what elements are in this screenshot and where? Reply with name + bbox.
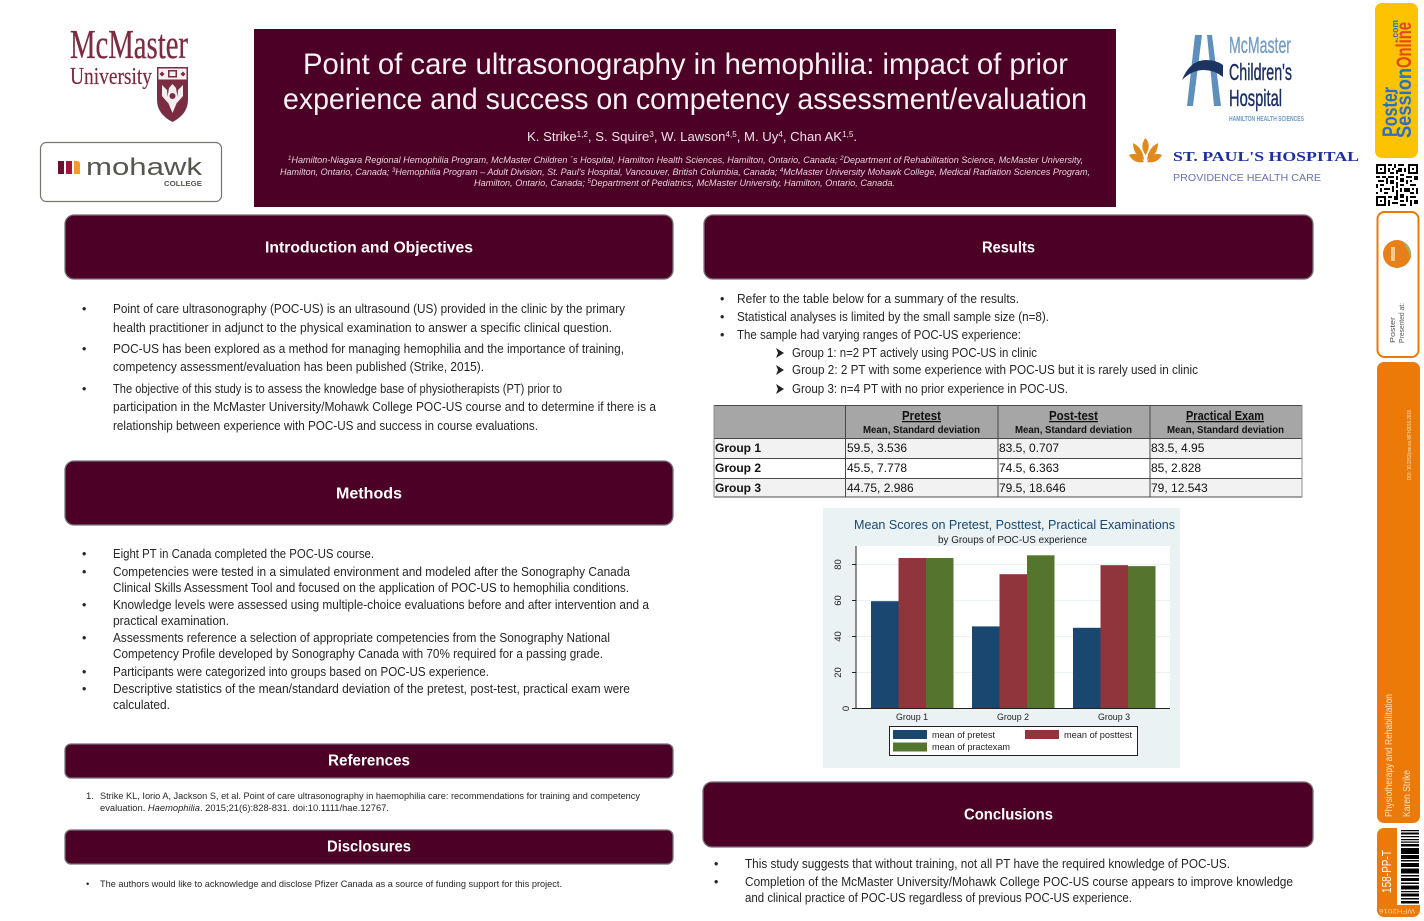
chart axes: Group 3: [1098, 712, 1130, 723]
affiliations: Hemophilia Program – Adult Division, St. Paul's Hospital, Vancouver, British Columbia, Canada;: [395, 167, 780, 177]
authors: , M. Uy: [737, 129, 779, 144]
text block: introduction bullets: participation in the McMaster University/Mohawk College POC-US course and to determine if there is a: [113, 400, 656, 414]
text block: reference list: 1.: [86, 791, 94, 802]
logo: McMaster Children's Hospital: Children's: [1229, 59, 1292, 85]
sidebar: QR code: [1376, 164, 1418, 206]
sidebar: barcode tag: [1377, 828, 1420, 917]
text block: conclusions bullets: Completion of the McMaster University/Mohawk College POC-US course appears to improve knowledge: [745, 875, 1293, 889]
authors: K. Strike: [527, 129, 576, 144]
sidebar: PosterSessionOnline logo: .com: [1390, 20, 1400, 40]
sidebar: presented at box: Poster: [1390, 316, 1397, 343]
text block: conclusions bullets: This study suggests that without training, not all PT have the required knowledge of POC-US.: [745, 857, 1230, 871]
affiliations: Hamilton, Ontario, Canada;: [280, 167, 389, 177]
text block: introduction bullets: Point of care ultrasonography (POC-US) is an ultrasound (US) provided in the clinic by the primary: [113, 302, 626, 316]
text block: introduction bullets: •: [82, 342, 86, 356]
text block: methods bullets: •: [82, 598, 86, 612]
text block: conclusions bullets: •: [714, 857, 718, 871]
authors: , Chan AK: [783, 129, 842, 144]
results table: Post-test: [1049, 409, 1099, 423]
sidebar: barcode tag: 158-PP-T: [1380, 850, 1394, 893]
text block: introduction bullets: POC-US has been explored as a method for managing hemophilia and the importance of training,: [113, 342, 624, 356]
text block: disclosure statement: The authors would like to acknowledge and disclose Pfizer Canada as a source of funding support for this project.: [100, 879, 562, 890]
panel: conclusions: [703, 782, 1313, 905]
text block: methods bullets: •: [82, 682, 86, 696]
affiliations: 3: [392, 168, 396, 174]
results table: 85, 2.828: [1151, 461, 1201, 475]
logo: St. Paul's Hospital: PROVIDENCE HEALTH CARE: [1173, 173, 1321, 184]
text block: introduction bullets: [82, 302, 656, 433]
text block: methods bullets: practical examination.: [113, 614, 229, 628]
heading: methods: [65, 461, 673, 525]
chart axes: 80: [833, 559, 844, 570]
results table: 83.5, 4.95: [1151, 441, 1205, 455]
results table: Group 3: [715, 481, 761, 495]
results table: Group 1: [715, 441, 761, 455]
text block: methods bullets: Knowledge levels were assessed using multiple-choice evaluations before and after intervention and a: [113, 598, 649, 612]
text block: conclusions bullets: •: [714, 875, 718, 889]
heading: conclusions: [703, 782, 1313, 847]
results table: 59.5, 3.536: [847, 441, 907, 455]
panel: results: [704, 215, 1313, 768]
text block: reference list: Strike KL, Iorio A, Jackson S, et al. Point of care ultrasonography in haemophilia care: recommendations for training and competency: [100, 791, 640, 802]
authors: 4: [778, 130, 783, 139]
heading: methods: Methods: [336, 486, 402, 502]
chart legend: mean of pretest: [932, 730, 995, 741]
chart axes: [833, 546, 1170, 723]
text block: introduction bullets: competency assessment/evaluation has been published (Strike, 2015).: [113, 360, 484, 374]
sidebar: orange details bar: Karen Strike: [1402, 770, 1413, 817]
chart axes: 20: [833, 667, 844, 678]
results table: Mean, Standard deviation: [863, 425, 980, 436]
results table: 44.75, 2.986: [847, 481, 914, 495]
text block: methods bullets: Descriptive statistics of the mean/standard deviation of the pretest, post-test, practical exam were: [113, 682, 630, 696]
results table: 79, 12.543: [1151, 481, 1208, 495]
text block: introduction bullets: •: [82, 382, 86, 396]
bars: group 2: [972, 555, 1054, 708]
text block: results bullets: Group 1: n=2 PT actively using POC-US in clinic: [792, 346, 1037, 360]
panel: disclosures: [65, 830, 673, 890]
results table: Practical Exam: [1186, 409, 1264, 423]
text block: methods bullets: Competency Profile developed by Sonography Canada with 70% required for a passing grade.: [113, 647, 603, 661]
logo: Mohawk College: [40, 142, 222, 202]
results table: 45.5, 7.778: [847, 461, 907, 475]
chart legend: mean of posttest: [1064, 730, 1132, 741]
authors: 4,5: [725, 130, 737, 139]
results table: 74.5, 6.363: [999, 461, 1059, 475]
affiliations: 1: [288, 156, 291, 162]
logo: McMaster Children's Hospital: HAMILTON HEALTH SCIENCES: [1229, 114, 1304, 123]
bars: group 1: [871, 558, 954, 708]
text block: methods bullets: Participants were categorized into groups based on POC-US experience.: [113, 665, 489, 679]
text block: reference list: evaluation. Haemophilia. 2015;21(6):828-831. doi:10.1111/hae.12767.: [100, 803, 389, 814]
authors: , W. Lawson: [654, 129, 725, 144]
chart subtitle: by Groups of POC-US experience: [938, 535, 1087, 546]
icon: congress emblem: [1383, 240, 1411, 268]
sidebar: barcode tag: WFH2016: [1379, 907, 1415, 914]
logo: Mohawk College: mohawk: [86, 154, 203, 181]
heading: results: [704, 215, 1313, 279]
heading: disclosures: [65, 830, 673, 864]
text block: methods bullets: •: [82, 565, 86, 579]
sidebar: orange details bar: Physiotherapy and Rehabilitation: [1384, 694, 1395, 817]
text block: methods bullets: Assessments reference a selection of appropriate competencies from the Sonography National: [113, 631, 610, 645]
chart legend: [890, 726, 1138, 756]
authors: 3: [649, 130, 654, 139]
text block: methods bullets: Competencies were tested in a simulated environment and modeled after the Sonography Canada: [113, 565, 630, 579]
logo: St. Paul's Hospital: [1129, 138, 1359, 184]
chart legend: mean of practexam: [932, 742, 1010, 753]
heading: disclosures: Disclosures: [327, 838, 411, 856]
affiliations: Hamilton-Niagara Regional Hemophilia Program, McMaster Children ´s Hospital, Hamilton Health Sciences, Hamilton, Ontario, Canada;: [291, 155, 840, 165]
logo: McMaster Children's Hospital: Hospital: [1229, 85, 1282, 111]
affiliations: [280, 155, 1090, 188]
sidebar: PosterSessionOnline logo: Session: [1393, 68, 1416, 138]
text block: introduction bullets: health practitioner in adjunct to the physical examination to answer a specific clinical question.: [113, 321, 612, 335]
logo: Mohawk College: COLLEGE: [164, 181, 202, 188]
title: [283, 48, 1087, 116]
text block: conclusions bullets: [714, 857, 1293, 905]
logo: McMaster Children's Hospital: McMaster: [1229, 32, 1291, 58]
title banner: [254, 29, 1116, 207]
text block: introduction bullets: •: [82, 302, 86, 316]
logo: McMaster University: McMaster: [70, 21, 188, 67]
affiliations: Department of Pediatrics, McMaster University, Hamilton, Ontario, Canada.: [591, 178, 895, 188]
panel: references: [65, 744, 673, 814]
text block: methods bullets: •: [82, 547, 86, 561]
sidebar: orange details bar: [1377, 362, 1420, 823]
affiliations: McMaster University Mohawk College, Medical Radiation Sciences Program,: [783, 167, 1090, 177]
chart axes: 40: [833, 631, 844, 642]
chart title: Mean Scores on Pretest, Posttest, Practical Examinations: [854, 518, 1175, 532]
results table: Mean, Standard deviation: [1167, 425, 1284, 436]
text block: results bullets: Group 3: n=4 PT with no prior experience in POC-US.: [792, 382, 1068, 396]
sidebar: PosterSessionOnline logo: Poster: [1379, 87, 1402, 137]
chart axes: 0: [841, 706, 852, 711]
heading: conclusions: Conclusions: [964, 806, 1053, 824]
logo: McMaster University: [70, 21, 188, 122]
title: experience and success on competency assessment/evaluation: [283, 83, 1087, 116]
text block: results bullets: •: [720, 292, 724, 306]
results table: 79.5, 18.646: [999, 481, 1066, 495]
text block: methods bullets: calculated.: [113, 698, 170, 712]
text block: results bullets: •: [720, 310, 724, 324]
heading: introduction and objectives: Introduction and Objectives: [265, 240, 473, 256]
bars: group 3: [1073, 565, 1156, 708]
text block: methods bullets: •: [82, 665, 86, 679]
sidebar: presented at box: Presented at:: [1399, 303, 1406, 343]
logo: St. Paul's Hospital: ST. PAUL'S HOSPITAL: [1173, 150, 1359, 165]
authors: 1,2: [577, 130, 588, 139]
text block: disclosure statement: •: [86, 879, 89, 890]
results table: Pretest: [902, 409, 942, 423]
results table: Mean, Standard deviation: [1015, 425, 1132, 436]
heading: introduction and objectives: [65, 215, 673, 279]
panel: introduction and objectives: [65, 215, 673, 433]
sidebar: PosterSessionOnline logo: Online: [1393, 22, 1416, 68]
text block: reference list: [86, 791, 640, 814]
logo: McMaster Children's Hospital: [1182, 32, 1304, 123]
text block: methods bullets: Clinical Skills Assessment Tool and focused on the application of POC-US to hemophilia conditions.: [113, 581, 629, 595]
text block: results bullets: The sample had varying ranges of POC-US experience:: [737, 328, 1021, 342]
text block: results bullets: Refer to the table below for a summary of the results.: [737, 292, 1019, 306]
affiliations: 5: [587, 179, 592, 185]
authors: .: [853, 129, 857, 144]
text block: methods bullets: •: [82, 631, 86, 645]
chart axes: 60: [833, 595, 844, 606]
text block: methods bullets: Eight PT in Canada completed the POC-US course.: [113, 547, 374, 561]
text block: introduction bullets: The objective of this study is to assess the knowledge base of physiotherapists (PT) prior to: [113, 382, 562, 396]
logo: McMaster University: University: [70, 64, 152, 90]
sidebar: orange details bar: DOI: 10.3252/pso.eu.WFH2016.2016: [1407, 410, 1413, 480]
sidebar: presented at box: [1378, 212, 1418, 357]
panel: methods: [65, 461, 673, 712]
authors: 1,5: [842, 130, 854, 139]
affiliations: Hamilton, Ontario, Canada;: [474, 178, 583, 188]
results table: [714, 405, 1302, 497]
bar chart: mean scores: [823, 508, 1180, 768]
text block: results bullets: Group 2: 2 PT with some experience with POC-US but it is rarely used in clinic: [792, 363, 1198, 377]
results table: Group 2: [715, 461, 761, 475]
affiliations: 2: [839, 156, 844, 162]
chart axes: Group 2: [997, 712, 1029, 723]
text block: conclusions bullets: and clinical practice of POC-US regardless of previous POC-US experience.: [745, 891, 1132, 905]
text block: results bullets: Statistical analyses is limited by the small sample size (n=8).: [737, 310, 1049, 324]
heading: references: References: [328, 752, 410, 770]
text block: methods bullets: [82, 547, 649, 712]
authors: , S. Squire: [588, 129, 649, 144]
sidebar: PosterSessionOnline logo: [1375, 3, 1418, 158]
heading: references: [65, 744, 673, 778]
text block: results bullets: [720, 292, 1198, 396]
affiliations: Department of Rehabilitation Science, McMaster University,: [843, 155, 1083, 165]
title: Point of care ultrasonography in hemophilia: impact of prior: [303, 48, 1068, 81]
heading: results: Results: [982, 240, 1035, 256]
text block: results bullets: •: [720, 328, 724, 342]
chart axes: Group 1: [896, 712, 928, 723]
text block: introduction bullets: relationship between experience with POC-US and success in course evaluations.: [113, 419, 538, 433]
affiliations: 4: [780, 168, 784, 174]
results table: 83.5, 0.707: [999, 441, 1059, 455]
